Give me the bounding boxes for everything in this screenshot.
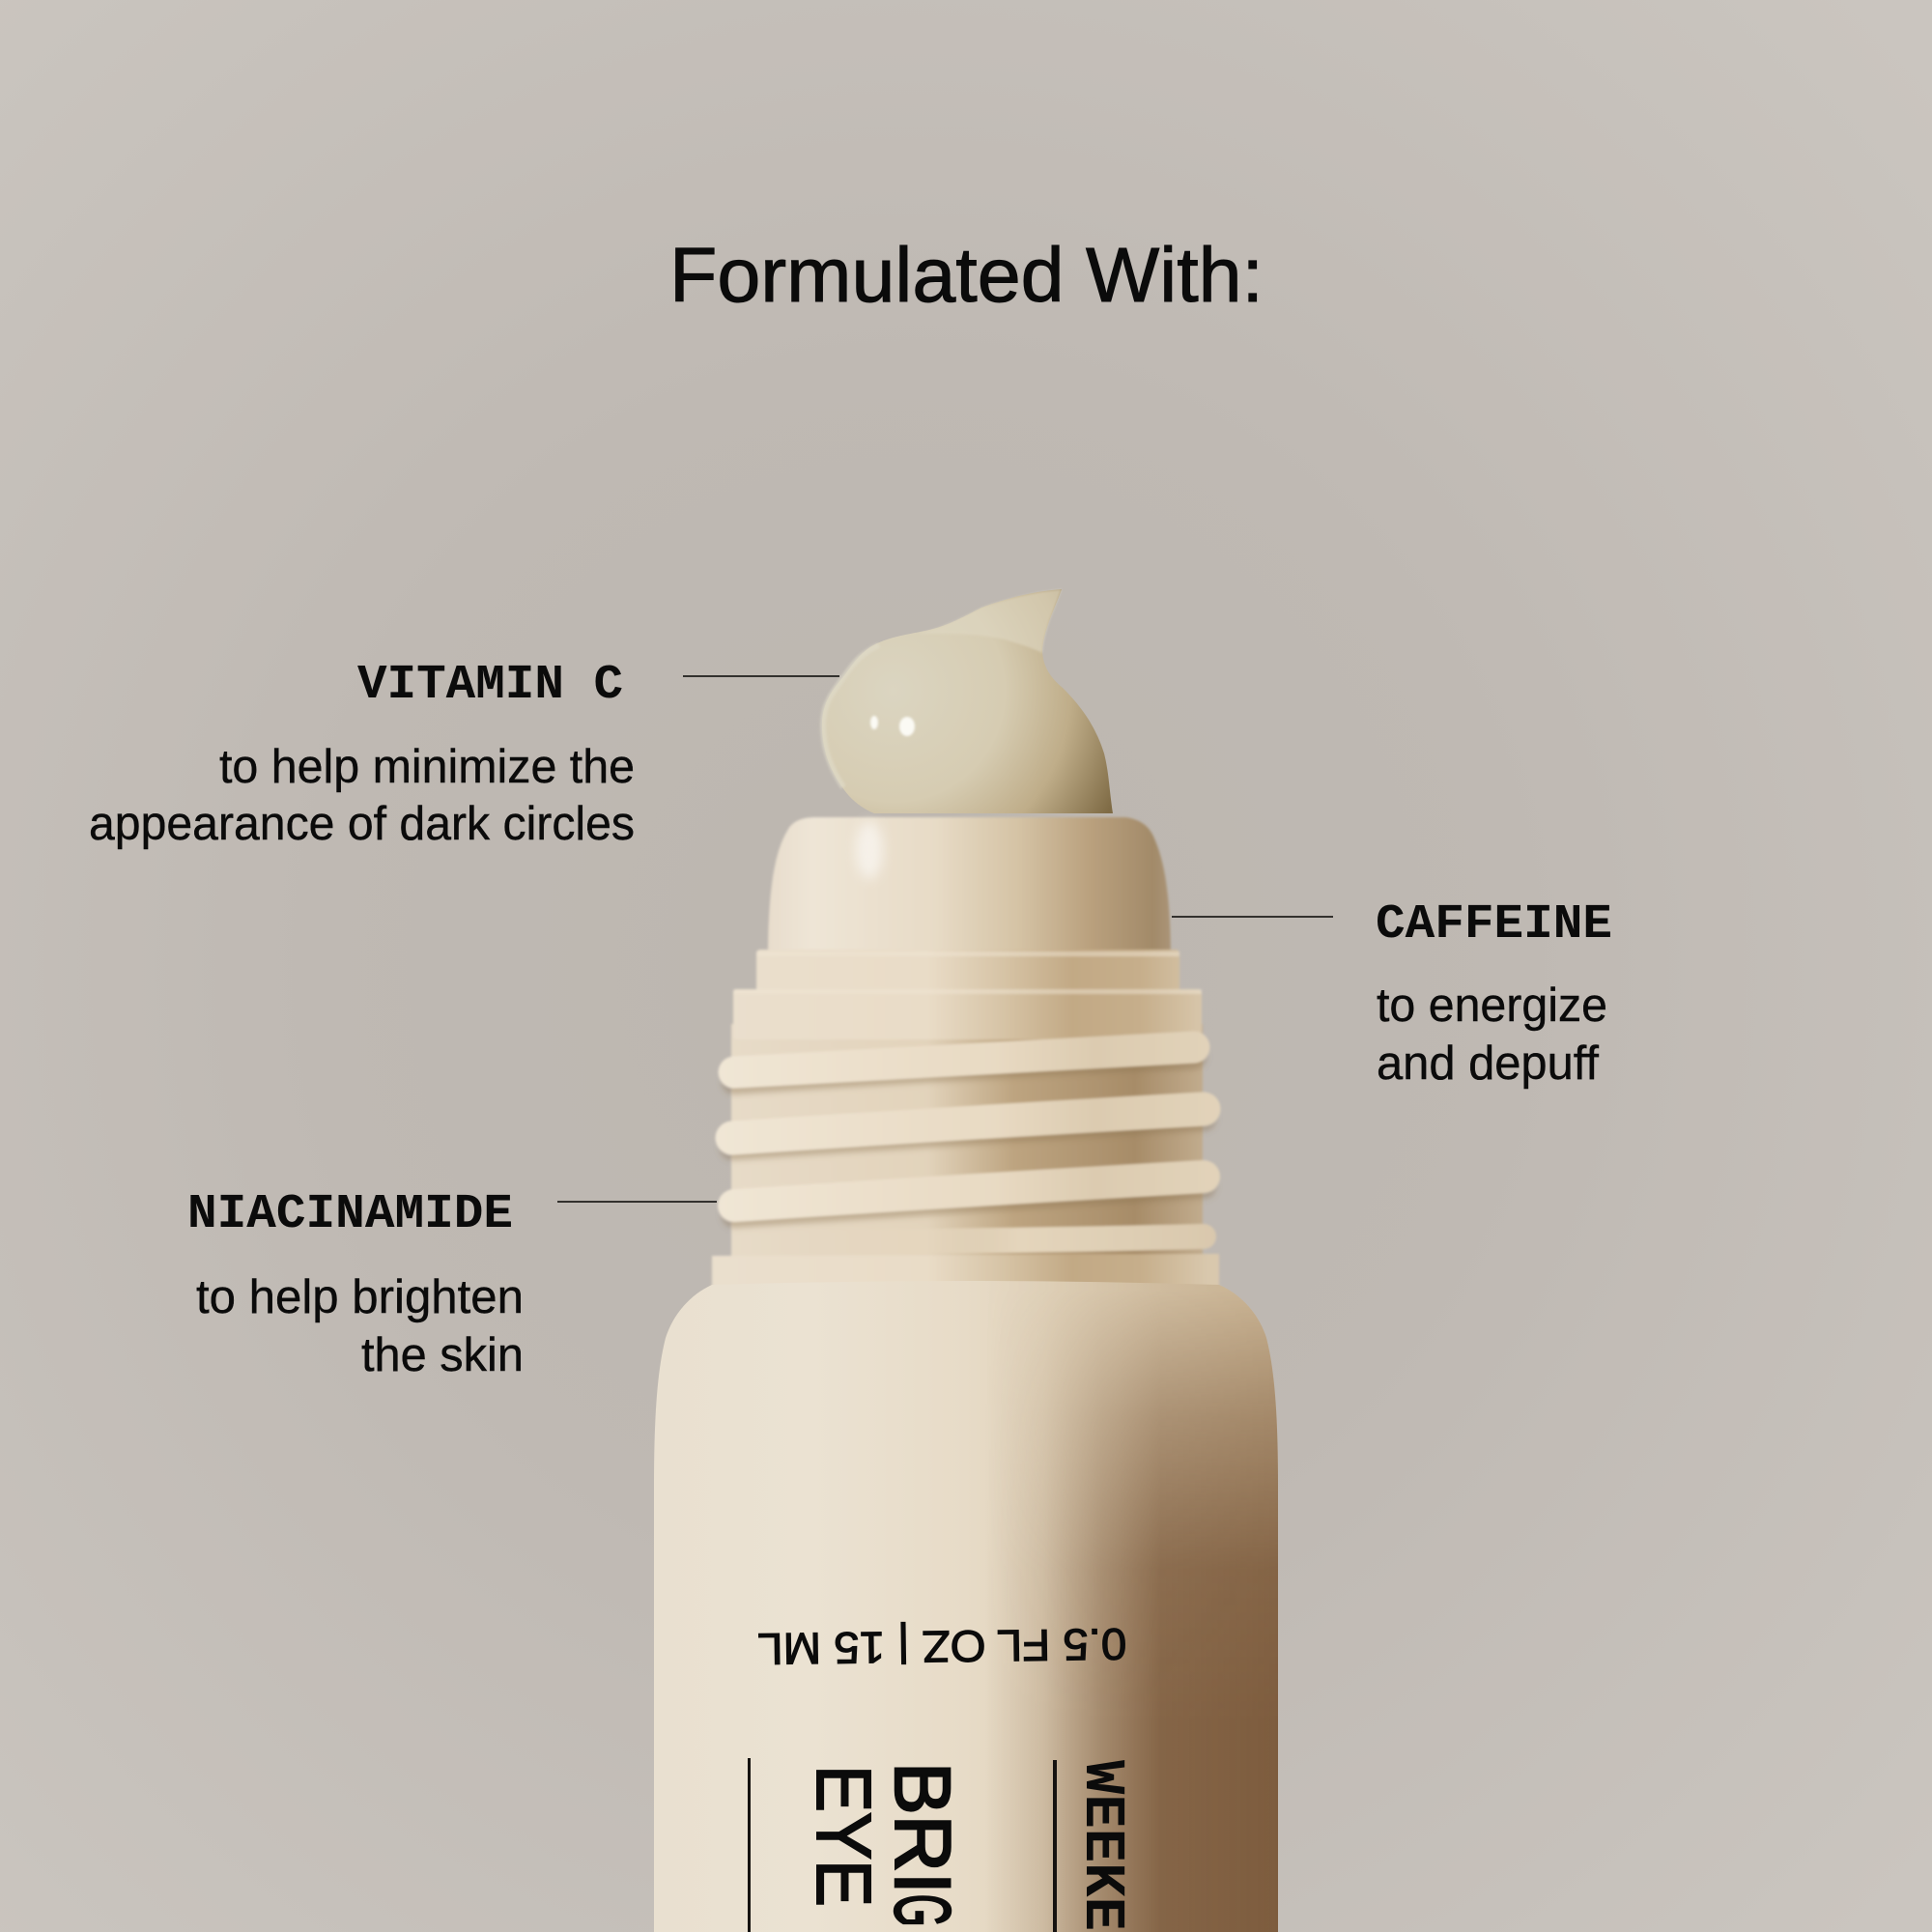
cap highlight [856, 821, 883, 879]
title: Formulated With: [669, 232, 1264, 318]
description: to energize [1377, 980, 1607, 1032]
tube body [647, 1265, 1285, 1932]
cream swirl [822, 589, 1113, 813]
label rule left [748, 1758, 751, 1932]
callout: caffeine [1172, 897, 1612, 1090]
collar [712, 1254, 1219, 1294]
second ring [733, 989, 1202, 1039]
upper ring [756, 950, 1179, 994]
leader line [683, 675, 839, 677]
tube neck and threads [712, 817, 1219, 1294]
leader line [1172, 916, 1333, 918]
cream rim light [823, 645, 879, 787]
product: tube [647, 817, 1285, 1932]
ingredient name: NIACINAMIDE [187, 1187, 513, 1242]
neck [731, 1024, 1203, 1265]
description: the skin [361, 1329, 524, 1381]
tube cap nozzle [768, 817, 1171, 961]
label rule right [1053, 1760, 1057, 1932]
description: to help minimize the [219, 741, 635, 793]
label text: WEEKE: WEEKE [1069, 1760, 1134, 1931]
screw threads [732, 1047, 1204, 1242]
callout: niacinamide [187, 1187, 717, 1381]
ingredient name: CAFFEINE [1376, 897, 1612, 952]
description: to help brighten [196, 1271, 524, 1323]
label text: EYE: EYE [801, 1765, 887, 1907]
leader line [557, 1201, 717, 1203]
cream glints [870, 716, 878, 729]
ingredient name: VITAMIN C [357, 658, 623, 713]
callout: vitamin c [89, 658, 839, 850]
description: and depuff [1377, 1037, 1599, 1090]
description: appearance of dark circles [89, 798, 635, 850]
cream tip highlight [918, 589, 1062, 653]
volume label: 0.5 FL OZ | 15 ML [757, 1619, 1127, 1674]
